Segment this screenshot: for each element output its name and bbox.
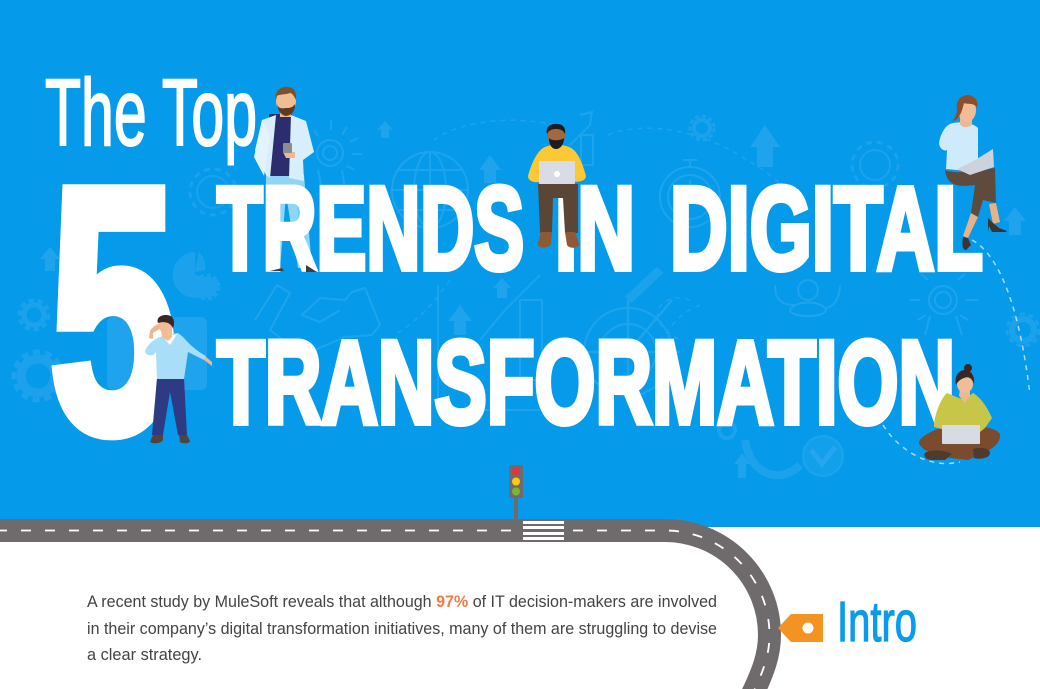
person: man scratching head: [145, 315, 212, 443]
intro paragraph: [87, 593, 717, 664]
shoes: [150, 435, 190, 443]
jacket: [255, 115, 314, 181]
icon: person with arrows: [775, 280, 840, 316]
sweater: [145, 333, 206, 379]
man's shoes over the title: [270, 265, 317, 272]
crosswalk: [523, 521, 564, 540]
heading: Intro: Intro: [837, 590, 917, 654]
hand: [204, 356, 212, 366]
paragraph line 3: a clear strategy.: [87, 646, 202, 664]
pole: [514, 497, 518, 520]
top: [934, 393, 992, 432]
title word: TRENDS: TRENDS: [217, 163, 524, 295]
blue header background: [0, 0, 1040, 527]
head: [547, 125, 565, 145]
trousers: [919, 426, 1000, 460]
neck and head: [960, 116, 972, 127]
trousers: [538, 184, 578, 233]
icon: stopwatch: [660, 160, 720, 227]
hand and phone: [283, 152, 295, 158]
trousers: [945, 168, 996, 217]
head: [276, 89, 296, 113]
hair and bun: [956, 370, 974, 385]
title: [45, 60, 983, 506]
icon: pie chart: [173, 252, 218, 298]
person: woman with laptop: [939, 95, 1007, 250]
green lamp: [512, 488, 520, 496]
person: woman seated cross-legged: [919, 364, 1000, 460]
title word: IN: IN: [555, 163, 635, 295]
housing: [509, 465, 523, 498]
icon: handshake: [255, 285, 380, 352]
heels: [962, 218, 1007, 250]
numeral 5: 5: [49, 115, 177, 506]
hair: [547, 124, 565, 134]
title line: The Top: The Top: [45, 60, 257, 166]
icon: target: [580, 270, 680, 400]
yellow lamp: [512, 478, 520, 486]
hair: [158, 315, 174, 328]
hair: [952, 95, 978, 122]
head and neck: [161, 330, 172, 341]
trousers: [266, 175, 312, 268]
paragraph line 1: A recent study by MuleSoft reveals that although 97% of IT decision-makers are involved: [87, 593, 717, 611]
neck: [280, 108, 291, 117]
road: [0, 519, 770, 689]
road surface: [0, 530, 770, 689]
shirt: [269, 114, 292, 176]
person: man with phone: [254, 87, 314, 268]
laptop: [539, 161, 575, 184]
shoes: [538, 232, 579, 248]
icon: growth chart: [438, 112, 593, 410]
icon: shield with check: [745, 436, 843, 476]
legs: [963, 203, 1000, 238]
icon: gears: [14, 116, 1039, 438]
white dashed route lines: [883, 240, 1030, 464]
collar: [163, 334, 177, 345]
tag hole: [802, 622, 814, 634]
beard: [277, 104, 295, 116]
icon: orange tag: [778, 614, 823, 642]
icon: globe: [392, 152, 468, 228]
paragraph line 2: in their company’s digital transformation initiatives, many of them are struggling to devise: [87, 620, 717, 638]
intro section marker: [778, 590, 917, 654]
background icon pattern: [14, 112, 1039, 478]
icon: light bulbs: [314, 120, 978, 335]
top: [939, 122, 978, 172]
shoes: [924, 448, 990, 460]
crosswalk base: [523, 519, 564, 542]
icon: up arrows: [40, 121, 1026, 478]
trousers: [152, 378, 187, 435]
sweater: [528, 145, 586, 184]
head and neck: [959, 388, 970, 403]
laptop: [942, 425, 980, 444]
beard: [549, 138, 564, 149]
red lamp: [512, 467, 520, 475]
dashed connector lines: [395, 120, 800, 340]
traffic light: [509, 465, 523, 520]
person: man in yellow sweater: [528, 124, 586, 248]
lane dashes: [0, 530, 770, 689]
panel shape behind the five: [107, 317, 207, 390]
hair: [276, 87, 296, 100]
laptop: [957, 149, 994, 175]
